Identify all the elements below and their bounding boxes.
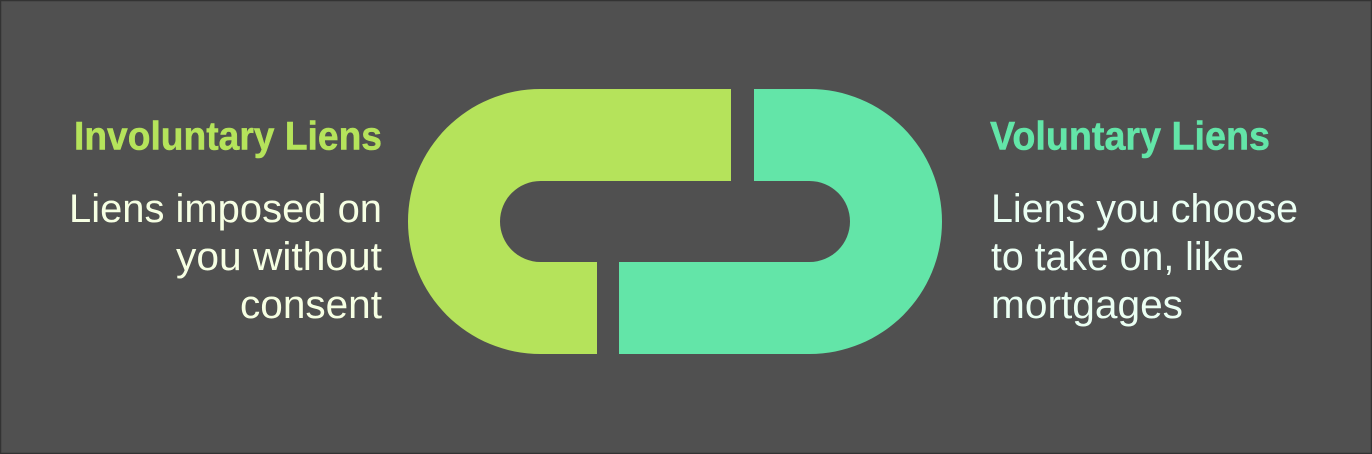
description: involuntary liens: consent [240,283,382,327]
description: voluntary liens: Liens you choose [991,187,1298,231]
description: involuntary liens [69,187,382,327]
description: voluntary liens: to take on, like [991,235,1244,279]
description: voluntary liens [991,187,1298,327]
panel: voluntary liens text [990,114,1298,327]
description: involuntary liens: Liens imposed on [69,187,382,231]
heading: voluntary liens: Voluntary Liens [990,114,1270,158]
chain link: left half, involuntary [408,89,731,354]
panel: involuntary liens text [69,114,382,327]
description: voluntary liens: mortgages [991,283,1183,327]
chain link: right half, voluntary [619,89,942,354]
heading: involuntary liens: Involuntary Liens [74,114,382,158]
description: involuntary liens: you without [176,235,382,279]
